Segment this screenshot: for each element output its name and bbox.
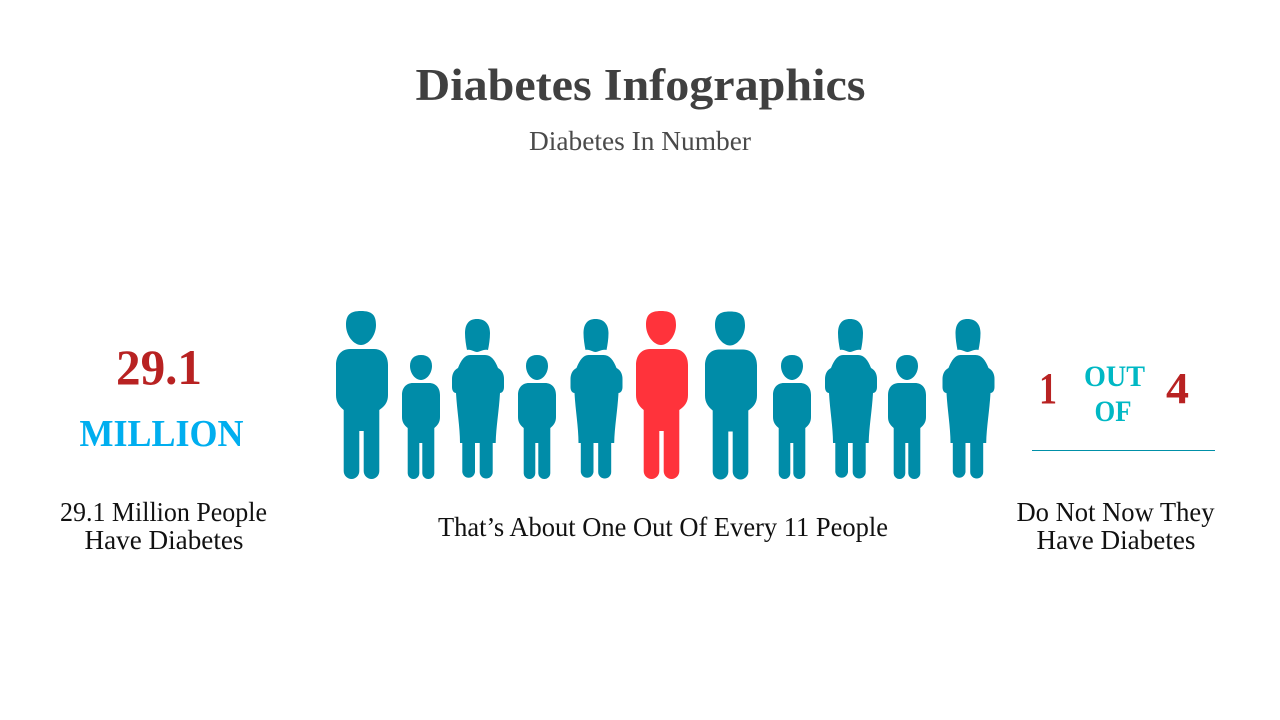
label: million: MILLION	[80, 413, 244, 455]
icon: woman	[942, 319, 994, 478]
icon: highlighted man	[636, 311, 688, 479]
caption: 29.1 million people	[60, 497, 267, 555]
icon: child	[773, 355, 811, 479]
title: Diabetes Infographics	[416, 60, 866, 110]
caption: do not know: Have Diabetes	[1036, 525, 1196, 555]
label: out of: OUT	[1084, 360, 1145, 393]
icon: man	[705, 312, 757, 479]
stat: 29.1 million	[80, 339, 244, 455]
icon: man	[336, 311, 388, 479]
icon: woman	[570, 319, 622, 478]
number: 1: 1	[1039, 364, 1057, 413]
subtitle: Diabetes In Number	[529, 126, 751, 156]
stat: 1 out of 4	[1032, 360, 1215, 450]
caption: 29.1 million people: Have Diabetes	[84, 525, 243, 555]
caption: do not know	[1016, 497, 1215, 555]
number: 29.1: 29.1	[116, 339, 202, 395]
caption: do not know: Do Not Now They	[1016, 497, 1215, 527]
label: out of	[1084, 360, 1145, 428]
caption: one out of every 11: That’s About One Out Of Every 11 People	[438, 512, 888, 542]
icon: child	[402, 355, 440, 479]
number: 4: 4	[1166, 364, 1189, 413]
icon: child	[888, 355, 926, 479]
icon: child	[518, 355, 556, 479]
icon: woman	[452, 319, 504, 478]
pictogram row: people	[336, 311, 994, 479]
label: out of: OF	[1094, 395, 1132, 428]
icon: woman	[825, 319, 877, 478]
caption: 29.1 million people: 29.1 Million People	[60, 497, 267, 527]
